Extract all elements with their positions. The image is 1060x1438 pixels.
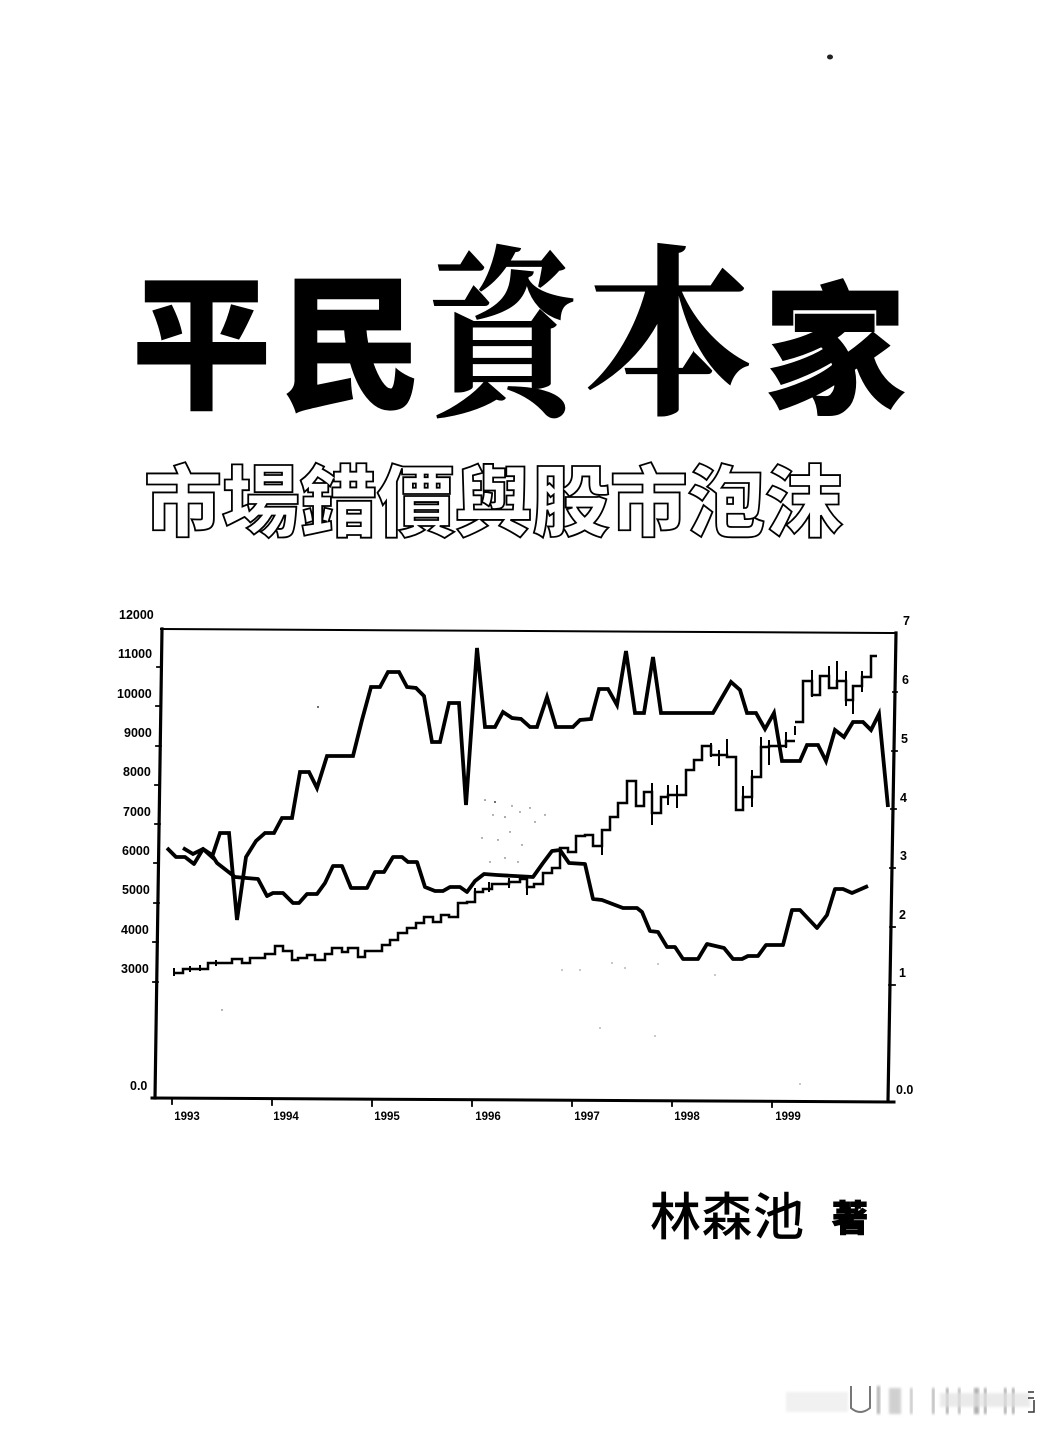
right axis labels: 0.0 bbox=[896, 1083, 913, 1097]
x axis year labels: 1998 bbox=[674, 1111, 700, 1123]
right axis labels: 3 bbox=[900, 849, 907, 863]
line chart bbox=[117, 608, 913, 1123]
stepped price series bbox=[173, 656, 877, 973]
right axis labels: 5 bbox=[901, 732, 908, 746]
left axis labels: 8000 bbox=[123, 765, 151, 779]
title character 本: 本 bbox=[584, 237, 753, 441]
subtitle: 市場錯價與股市泡沫: 市場錯價與股市泡沫 bbox=[144, 459, 843, 547]
x axis year labels: 1993 bbox=[174, 1111, 200, 1123]
x axis year labels: 1996 bbox=[475, 1111, 501, 1123]
left axis labels: 4000 bbox=[121, 923, 149, 937]
left axis labels: 5000 bbox=[122, 883, 150, 897]
speck at top of page bbox=[827, 54, 833, 60]
bottom-right scan smudge bbox=[786, 1386, 1034, 1414]
scan speckles bbox=[221, 706, 801, 1085]
left axis labels bbox=[117, 608, 154, 1093]
author name: 林森池 bbox=[650, 1189, 804, 1246]
title character 平: 平 bbox=[132, 266, 271, 429]
chart frame axes bbox=[152, 629, 897, 1107]
left axis labels: 0.0 bbox=[130, 1079, 147, 1093]
right axis labels bbox=[896, 614, 913, 1097]
price bar wicks bbox=[174, 655, 871, 976]
upper thick line series bbox=[183, 648, 888, 920]
right axis labels: 6 bbox=[902, 673, 909, 687]
title character 家: 家 bbox=[764, 274, 906, 433]
left axis labels: 7000 bbox=[123, 805, 151, 819]
right axis labels: 1 bbox=[899, 966, 906, 980]
x axis year labels: 1997 bbox=[574, 1111, 600, 1123]
x axis year labels: 1999 bbox=[775, 1111, 801, 1123]
left axis labels: 10000 bbox=[117, 687, 152, 701]
title character 資: 資 bbox=[428, 238, 586, 442]
left axis labels: 3000 bbox=[121, 962, 149, 976]
author: 林森池 著 bbox=[650, 1189, 868, 1246]
x axis year labels bbox=[174, 1111, 801, 1123]
x axis year labels: 1994 bbox=[273, 1111, 299, 1123]
left axis labels: 6000 bbox=[122, 844, 150, 858]
left axis labels: 9000 bbox=[124, 726, 152, 740]
right axis labels: 2 bbox=[899, 908, 906, 922]
title character 民: 民 bbox=[280, 266, 422, 429]
lower thick line series bbox=[167, 848, 868, 959]
title: 平民資本家 bbox=[132, 237, 906, 442]
left axis labels: 12000 bbox=[119, 608, 154, 622]
author suffix: 著 bbox=[832, 1198, 868, 1239]
left axis labels: 11000 bbox=[118, 647, 152, 661]
x axis year labels: 1995 bbox=[374, 1111, 400, 1123]
right axis labels: 4 bbox=[900, 791, 907, 805]
right axis labels: 7 bbox=[903, 614, 910, 628]
